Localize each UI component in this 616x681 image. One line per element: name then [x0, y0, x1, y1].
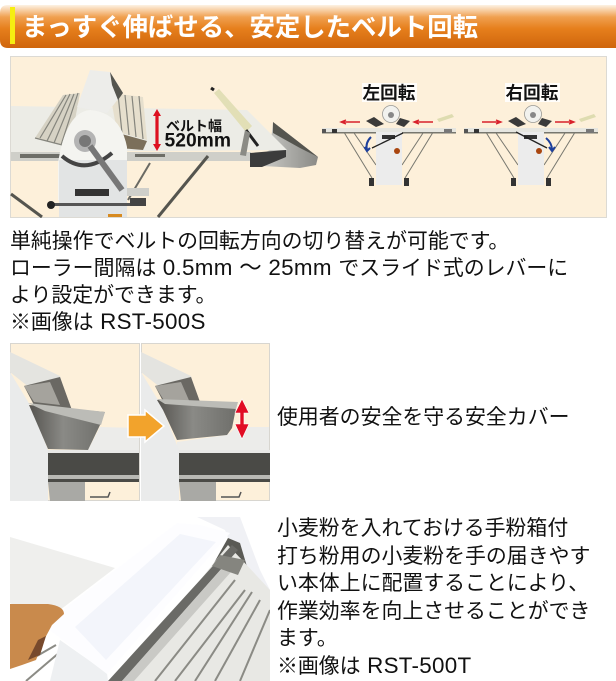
text: flour box description: い本体上に配置することにより、	[277, 572, 589, 595]
text: rotation description: より設定ができます。	[10, 284, 216, 307]
text: rotation description: ※画像は RST-500S	[10, 309, 206, 334]
diagram: left rotation: 左回転	[362, 83, 416, 103]
text: flour box description: 打ち粉用の小麦粉を手の届きやす	[277, 544, 590, 568]
label: belt width: 520mm	[164, 130, 231, 152]
sub-element: white flour box	[43, 523, 230, 674]
text: flour box description: ※画像は RST-500T	[277, 652, 472, 678]
panel: safety cover photos	[10, 343, 270, 501]
arrow: red up down	[235, 399, 249, 439]
photo: flour box on machine	[10, 517, 270, 681]
panel: belt width and rotation photos	[10, 56, 607, 218]
text: flour box description: 小麦粉を入れておける手粉箱付	[277, 517, 568, 540]
photo: cover closed	[141, 343, 280, 502]
text: flour box description	[277, 517, 590, 678]
text: rotation description: 単純操作でベルトの回転方向の切り替えが可能です。	[10, 230, 509, 253]
photo: cover open	[10, 344, 140, 501]
heading banner	[0, 5, 616, 48]
label: belt width: ベルト幅	[166, 118, 222, 134]
text: rotation description: ローラー間隔は 0.5mm ～ 25mm でスライド式のレバーに	[10, 255, 568, 280]
text: safety cover: 使用者の安全を守る安全カバー	[277, 406, 569, 429]
text: flour box description: ます。	[277, 627, 338, 650]
label: belt width	[153, 109, 231, 152]
arrow: orange transition	[128, 410, 164, 442]
diagram: left rotation	[322, 83, 456, 186]
diagram: right rotation: 右回転	[506, 83, 559, 103]
heading banner: まっすぐ伸ばせる、安定したベルト回転	[22, 14, 478, 42]
text: rotation description	[10, 230, 568, 334]
photo: dough sheeter machine	[11, 70, 318, 217]
diagram: right rotation	[464, 83, 598, 186]
text: flour box description: 作業効率を向上させることができ	[277, 600, 590, 622]
